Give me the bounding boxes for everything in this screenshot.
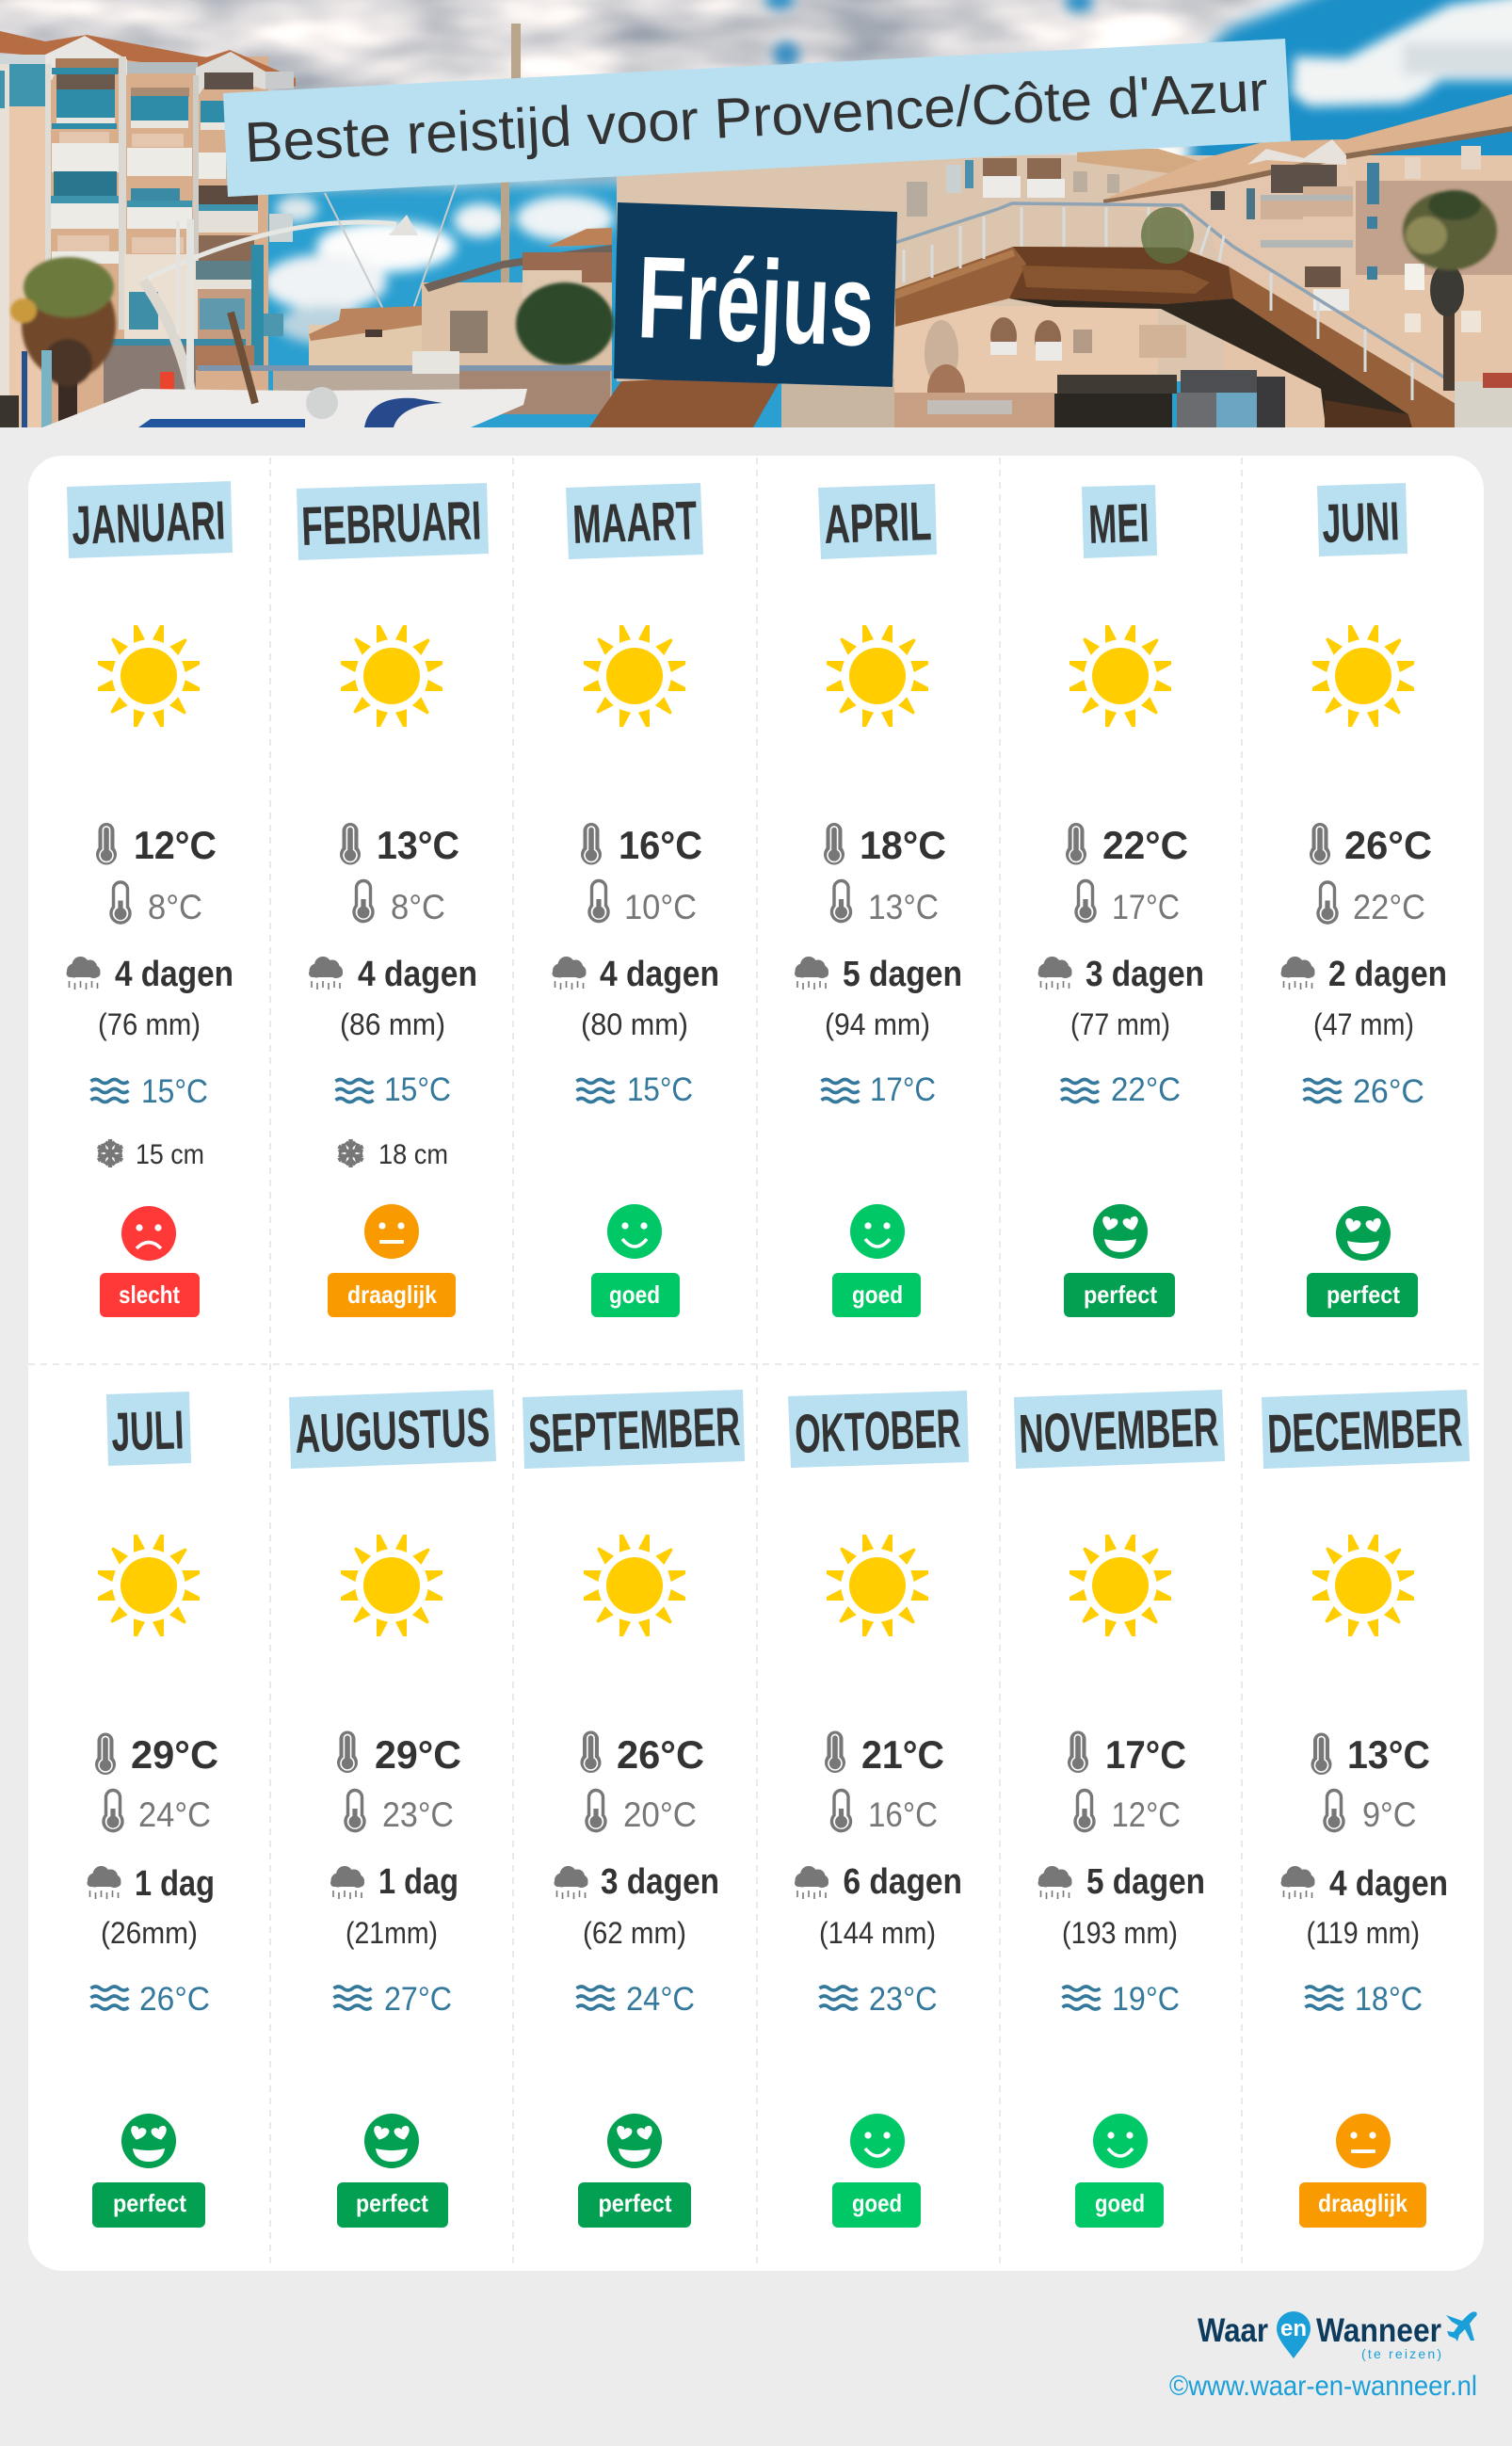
wordmark second part: Wanneer [1316,2312,1441,2349]
logo: Waar en Wanneer [1198,2311,1477,2361]
icon: waves [1305,1987,1343,2009]
icon: smiling face [850,2114,905,2168]
right building [1103,94,1512,427]
rain days: 6 dagen [844,1862,962,1902]
rating: perfect: perfect [1084,1280,1157,1309]
rating: goed: goed [852,1280,903,1309]
rainfall: (86 mm) [340,1007,445,1041]
sea temperature: 26°C [1353,1073,1424,1110]
heading: februari: FEBRUARI [300,490,482,557]
sea temperature: 24°C [626,1981,695,2018]
icon: love face [121,2114,176,2168]
icon: waves [576,1079,614,1102]
icon: min thermometer [111,882,130,923]
min temperature: 13°C [868,888,939,926]
max temperature: 17°C [1105,1732,1186,1777]
rainfall: (80 mm) [581,1007,688,1041]
heading: september: SEPTEMBER [527,1396,741,1465]
rating: goed [832,2182,921,2228]
rain days: 1 dag [378,1862,458,1902]
min temperature: 24°C [138,1795,211,1834]
min temperature: 8°C [391,888,445,926]
sky [268,177,1181,427]
website url: ©www.waar-en-wanneer.nl [1169,2371,1477,2402]
month: december [1262,1390,1470,2228]
icon: love face [1336,1206,1391,1261]
icon: waves [821,1079,859,1102]
rating: goed: goed [852,2189,902,2217]
icon: waves [576,1987,614,2009]
icon: sun [827,1535,928,1636]
heading: september [523,1390,745,1469]
left apartment building [0,31,296,427]
city label: Fréjus [614,202,897,387]
header photo: Fréjus harbour [0,0,1512,427]
icon: min thermometer [1325,1791,1343,1831]
icon: min thermometer [1075,1791,1094,1831]
heading: april [818,484,937,559]
max temperature: 16°C [619,823,702,867]
icon: waves [1303,1079,1341,1102]
icon: waves [90,1987,128,2009]
rating: draaglijk [1299,2182,1426,2228]
pin label: en [1280,2316,1307,2341]
wooden bridge [895,247,1488,427]
sea temperature: 26°C [139,1981,210,2018]
heading: november: NOVEMBER [1018,1396,1219,1465]
moored boats [0,312,527,427]
max temperature: 22°C [1102,823,1188,867]
rain days: 5 dagen [843,955,962,994]
rainfall: (62 mm) [583,1916,686,1950]
month: november [1014,1390,1225,2228]
icon: smiling face [850,1204,905,1259]
palm tree right [1403,190,1497,391]
heading: juni: JUNI [1321,491,1400,555]
icon: sun [1312,1535,1414,1636]
max temperature: 13°C [377,823,459,867]
rain days: 4 dagen [600,955,719,994]
max temperature: 12°C [134,823,217,867]
city label: Fréjus: Fréjus [635,233,877,371]
month: mei [1037,485,1204,1317]
min temperature: 8°C [148,888,202,926]
icon: sad face [121,1206,176,1261]
rating: draaglijk [328,1273,456,1317]
mast and rigging [143,24,521,427]
rating: perfect: perfect [599,2189,672,2217]
icon: sun [1312,625,1414,727]
centre building [617,149,1224,394]
white clouds [263,0,1512,344]
icon: min thermometer [104,1791,122,1831]
sea temperature: 27°C [384,1981,452,2018]
heading: januari: JANUARI [71,490,226,556]
icon: neutral face [1336,2114,1391,2168]
rating: perfect [337,2182,448,2228]
icon: waves [335,1079,373,1102]
min temperature: 20°C [623,1795,697,1834]
rainfall: (77 mm) [1070,1007,1170,1041]
heading: oktober [788,1391,969,1468]
rainfall: (21mm) [346,1916,438,1950]
rain days: 4 dagen [115,955,233,994]
heading: oktober: OKTOBER [794,1398,961,1465]
icon: rain cloud [87,1866,121,1899]
icon: sun [98,625,200,727]
icon: max thermometer [95,1732,116,1775]
icon: rain cloud [330,1866,364,1899]
icon: waves [333,1987,371,2009]
heading: januari [67,481,233,558]
icon: sun [341,1535,442,1636]
rating: slecht: slecht [119,1280,180,1309]
snowfall: 18 cm [378,1139,448,1170]
icon: rain cloud [1037,1866,1071,1899]
icon: max thermometer [581,823,602,864]
rating: goed [1075,2182,1164,2228]
rating: draaglijk: draaglijk [347,1280,437,1309]
icon: sun [1070,1535,1171,1636]
rainfall: (26mm) [101,1916,198,1950]
icon: neutral face [364,1204,419,1259]
icon: max thermometer [1311,1732,1331,1775]
ramp near title card [589,378,781,427]
logo: Waar en Wanneer: Waar [1198,2312,1268,2349]
icon: sun [341,625,442,727]
sea temperature: 15°C [627,1071,693,1108]
rain days: 2 dagen [1328,955,1447,994]
icon: love face [1093,1204,1148,1259]
icon: min thermometer [832,881,851,922]
rain days: 5 dagen [1086,1862,1205,1902]
panel: climate table [28,456,1484,2271]
rating: slecht [100,1273,200,1317]
icon: sun [584,1535,685,1636]
sea temperature: 18°C [1355,1981,1423,2018]
clouds [0,0,1346,188]
sea temperature: 23°C [869,1981,938,2018]
max temperature: 13°C [1347,1732,1430,1777]
icon: max thermometer [580,1730,601,1773]
icon: min thermometer [1076,881,1095,922]
rating: perfect: perfect [113,2189,186,2217]
rain days: 3 dagen [601,1862,719,1902]
icon: map pin [1277,2311,1311,2358]
min temperature: 23°C [382,1795,454,1834]
icon: snowflake [336,1139,365,1167]
icon: min thermometer [587,1791,605,1831]
rainfall: (119 mm) [1307,1916,1420,1950]
upper right deep blue sky [1189,0,1512,155]
sea temperature: 17°C [870,1071,936,1108]
shops under the bridge [781,370,1512,427]
icon: max thermometer [340,823,361,864]
palm tree left [10,257,116,427]
icon: min thermometer [1318,882,1337,923]
icon: max thermometer [96,823,117,864]
rating: goed: goed [609,1280,660,1309]
icon: waves [1062,1987,1100,2009]
max temperature: 26°C [1344,823,1432,867]
max temperature: 18°C [860,823,946,867]
rain days: 3 dagen [1086,955,1204,994]
rating: goed [591,1273,680,1317]
icon: sun [1070,625,1171,727]
month: maart [552,483,719,1317]
title ribbon: Beste reistijd voor Provence/Côte d'Azur: Beste reistijd voor Provence/Côte d'Azur [243,59,1269,174]
icon: airplane [1446,2311,1477,2341]
rating: perfect: perfect [356,2189,428,2217]
icon: max thermometer [1068,1730,1088,1773]
sea temperature: 15°C [141,1073,208,1110]
heading: februari [297,483,489,560]
icon: max thermometer [824,823,844,864]
icon: love face [364,2114,419,2168]
icon: sun [584,625,685,727]
rating: draaglijk: draaglijk [1318,2189,1407,2217]
rating: perfect [578,2182,691,2228]
icon: smiling face [607,1204,662,1259]
rain days: 1 dag [135,1864,215,1904]
min temperature: 22°C [1353,888,1425,926]
min temperature: 10°C [624,888,697,926]
heading: april: APRIL [823,491,932,555]
month: september [523,1390,745,2228]
icon: waves [819,1987,857,2009]
heading: juli: JULI [110,1399,185,1463]
rating: goed [832,1273,921,1317]
heading: maart: MAART [571,490,698,555]
icon: rain cloud [66,957,100,990]
max temperature: 29°C [375,1732,461,1777]
rating: goed: goed [1095,2189,1145,2217]
icon: rain cloud [309,957,343,990]
icon: rain cloud [552,957,586,990]
month: oktober [788,1391,969,2228]
month: juni [1280,483,1447,1317]
rating: perfect [1307,1273,1418,1317]
icon: waves [90,1079,128,1102]
rainfall: (94 mm) [825,1007,930,1041]
heading: juni [1317,483,1407,556]
icon: rain cloud [1280,1866,1314,1899]
min temperature: 9°C [1362,1795,1416,1834]
heading: mei: MEI [1087,492,1150,555]
icon: max thermometer [337,1730,358,1773]
heading: mei [1082,485,1157,558]
rainfall: (193 mm) [1062,1916,1178,1950]
rating: perfect [92,2182,205,2228]
icon: min thermometer [346,1791,364,1831]
icon: max thermometer [825,1730,845,1773]
sea temperature: 15°C [384,1071,451,1108]
rainfall: (47 mm) [1313,1007,1414,1041]
tagline: (te reizen) [1361,2346,1441,2361]
icon: min thermometer [589,881,608,922]
month: april [795,484,962,1317]
icon: rain cloud [795,957,828,990]
icon: rain cloud [554,1866,587,1899]
heading: juli [106,1392,191,1466]
min temperature: 17°C [1112,888,1180,926]
month: juli [87,1392,218,2228]
rating: perfect [1064,1273,1175,1317]
heading: november [1014,1390,1225,1469]
icon: min thermometer [354,881,373,922]
sea temperature: 19°C [1112,1981,1180,2018]
icon: smiling face [1093,2114,1148,2168]
max temperature: 26°C [617,1732,704,1777]
max temperature: 21°C [861,1732,944,1777]
rainfall: (76 mm) [98,1007,201,1041]
sea temperature: 22°C [1111,1071,1181,1108]
icon: waves [1061,1079,1099,1102]
icon: max thermometer [1310,823,1330,864]
icon: max thermometer [1066,823,1086,864]
icon: love face [607,2114,662,2168]
icon: snowflake [96,1139,124,1167]
heading: maart [566,483,703,559]
heading: augustus: AUGUSTUS [294,1396,491,1465]
distant buildings and tree [198,228,614,414]
rainfall: (144 mm) [819,1916,936,1950]
month: augustus [289,1390,496,2228]
snowfall: 15 cm [136,1139,204,1170]
title ribbon: Beste reistijd voor Provence/Côte d'Azur [223,39,1291,197]
month: februari [297,483,489,1317]
bridge railing [894,203,1473,400]
rain days: 4 dagen [358,955,477,994]
rain days: 4 dagen [1329,1864,1448,1904]
icon: rain cloud [1280,957,1314,990]
icon: min thermometer [832,1791,851,1831]
icon: rain cloud [795,1866,828,1899]
icon: rain cloud [1037,957,1071,990]
month: januari [66,481,233,1317]
rating: perfect: perfect [1327,1280,1400,1309]
icon: sun [827,625,928,727]
min temperature: 16°C [868,1795,938,1834]
max temperature: 29°C [131,1732,218,1777]
heading: augustus [289,1390,496,1469]
min temperature: 12°C [1111,1795,1181,1834]
icon: sun [98,1535,200,1636]
